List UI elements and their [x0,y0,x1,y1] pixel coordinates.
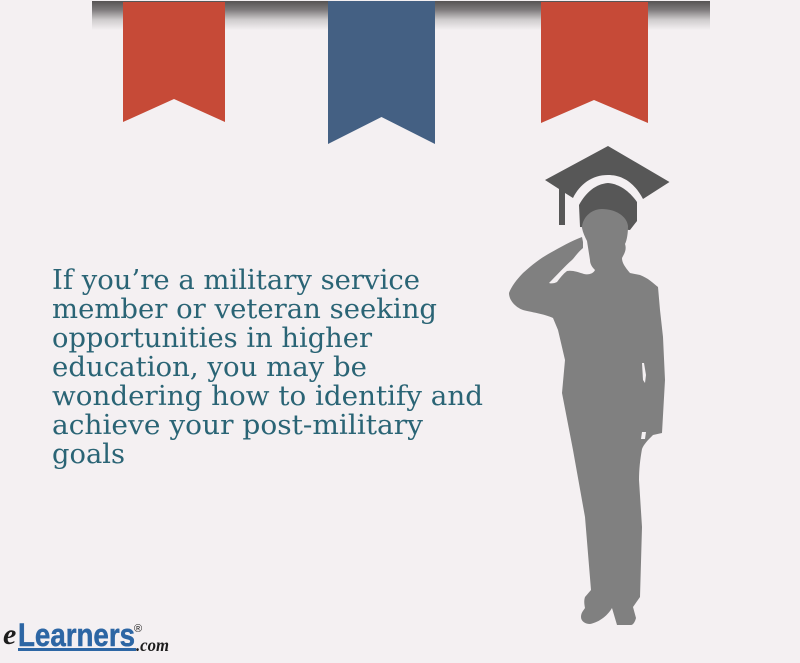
intro text block: achieve your post-military [52,410,424,441]
logo: eLearners.com: e [3,618,16,651]
ribbon: centre blue [328,1,435,144]
ribbon: right red [541,2,648,123]
intro text block: wondering how to identify and [52,381,483,412]
intro text block: education, you may be [52,352,367,383]
logo: eLearners.com: ® [134,623,142,635]
logo: eLearners.com: Learners [18,617,135,653]
icon: graduation cap [545,146,670,230]
saluting soldier silhouette [509,209,665,625]
intro text block: goals [52,439,125,470]
intro text block: If you’re a military service [52,265,420,296]
intro text block: opportunities in higher [52,323,372,354]
intro text block: member or veteran seeking [52,294,437,325]
banner rail shadow [92,1,710,30]
intro text block [52,265,483,470]
logo: eLearners.com: .com [136,635,169,655]
ribbon: left red [123,2,225,122]
